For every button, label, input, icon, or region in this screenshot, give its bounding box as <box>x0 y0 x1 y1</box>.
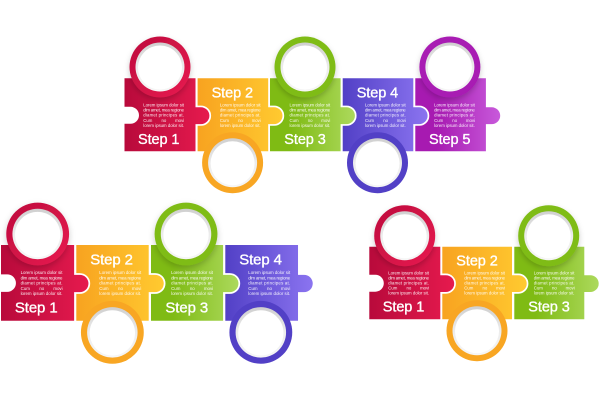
piece: step 1 with notch and tab <box>124 78 209 151</box>
text: step 1 body <box>21 270 63 296</box>
piece: step 3 with tab <box>151 245 238 321</box>
text: step 3 body: dim amet, mea regione <box>171 275 214 280</box>
text: step 4 body: Lorem ipsum dolor sit <box>365 103 406 108</box>
text: step 1 body: movi <box>53 286 63 291</box>
text: step 4 body: dim amet, mea regione <box>365 108 406 113</box>
heading: step 5: Step 5 <box>429 132 470 148</box>
panel: bottom right, step 3 <box>514 205 599 319</box>
panel: bottom left, step 4 <box>225 245 313 364</box>
text: step 4 body: lorem ipsum dolor sit. <box>365 123 406 128</box>
text: step 1 body: lorem ipsum dolor sit. <box>388 291 429 296</box>
text: step 1 body: no <box>39 286 45 291</box>
ring: step 1 <box>374 205 435 266</box>
panel: top row, step 2 <box>198 78 282 193</box>
text: step 2 body: dim amet, mea regione <box>99 275 142 280</box>
text: step 4 body: dim amet, mea regione <box>248 275 291 280</box>
piece: step 5 with tab <box>415 78 500 151</box>
panel: top row, step 5 <box>415 37 500 151</box>
text: step 1 body: Lorem ipsum dolor sit <box>21 270 63 275</box>
text: step 2 body: Cum <box>99 286 109 291</box>
piece: step 3 with tab <box>270 78 355 151</box>
ring: step 4 <box>347 132 408 193</box>
piece: step 2 with tab <box>198 78 282 151</box>
heading: step 4: Step 4 <box>357 85 398 101</box>
text: step 2 body <box>99 270 142 296</box>
text: step 1 body: movi <box>175 118 184 123</box>
piece: step 4 with tab <box>225 245 313 321</box>
text: step 3 body <box>171 270 214 296</box>
text: step 3 body: dim amet, mea regione <box>534 276 575 281</box>
text: step 3 body: Cum <box>171 286 181 291</box>
text: step 4 body: no <box>267 286 272 291</box>
text: step 4 body: diamet principes at. <box>365 113 406 118</box>
text: step 3 body: dim amet, mea regione <box>290 108 331 113</box>
piece: step 1 with notch and tab <box>369 247 454 319</box>
text: step 3 body: movi <box>566 286 575 291</box>
text: step 1 body: Lorem ipsum dolor sit <box>388 271 430 276</box>
piece: step 4 with tab <box>343 78 428 151</box>
text: step 2 body: Lorem ipsum dolor sit <box>220 103 261 108</box>
text: step 5 body: movi <box>466 118 475 123</box>
text: step 3 body <box>534 271 575 296</box>
panel: bottom left, step 2 <box>76 245 164 364</box>
text: step 5 body: lorem ipsum dolor sit. <box>434 123 475 128</box>
text: step 3 body: movi <box>321 118 330 123</box>
panel: top row, step 1 <box>124 37 209 151</box>
text: step 3 body: Lorem ipsum dolor sit <box>534 271 575 276</box>
text: step 2 body: Lorem ipsum dolor sit <box>99 270 142 275</box>
piece: step 3 with tab <box>514 247 599 319</box>
text: step 2 body: diamet principes at. <box>220 113 261 118</box>
text: step 3 body <box>290 102 331 128</box>
heading: step 2: Step 2 <box>212 85 253 101</box>
text: step 2 body: Cum <box>220 118 229 123</box>
text: step 5 body: Lorem ipsum dolor sit <box>434 103 476 108</box>
text: step 5 body: no <box>452 118 458 123</box>
text: step 1 body: Cum <box>21 286 30 291</box>
ring: step 3 <box>274 37 336 98</box>
text: step 3 body: no <box>552 286 557 291</box>
text: step 1 body <box>388 271 430 296</box>
heading: step 3: Step 3 <box>284 132 326 148</box>
text: step 1 body: no <box>406 286 412 291</box>
text: step 3 body: Lorem ipsum dolor sit <box>290 103 331 108</box>
text: step 2 body: dim amet, mea regione <box>464 276 506 281</box>
text: step 3 body: Cum <box>290 118 299 123</box>
text: step 3 body: lorem ipsum dolor sit. <box>534 291 574 296</box>
text: step 4 body: Cum <box>248 286 258 291</box>
text: step 2 body: no <box>482 286 488 291</box>
text: step 4 body: movi <box>397 118 406 123</box>
heading: step 4: Step 4 <box>239 252 282 269</box>
ring: step 4 <box>229 301 292 364</box>
panel: top row, step 4 <box>343 78 428 193</box>
text: step 2 body: dim amet, mea regione <box>220 108 261 113</box>
text: step 3 body: diamet principes at. <box>171 281 213 286</box>
text: step 5 body: Cum <box>434 118 444 123</box>
text: step 2 body: Cum <box>464 286 474 291</box>
text: step 4 body: diamet principes at. <box>248 281 290 286</box>
text: step 3 body: lorem ipsum dolor sit. <box>171 291 213 296</box>
text: step 4 body: Lorem ipsum dolor sit <box>248 270 291 275</box>
ring: step 2 <box>202 132 263 193</box>
text: step 4 body <box>248 270 291 296</box>
text: step 4 body: no <box>383 118 389 123</box>
piece: step 1 with notch and tab <box>1 245 88 321</box>
text: step 2 body: lorem ipsum dolor sit. <box>99 291 141 296</box>
heading: step 1: Step 1 <box>383 300 424 316</box>
piece: step 2 with tab <box>76 245 164 321</box>
ring: step 2 <box>446 300 508 361</box>
text: step 1 body: Cum <box>388 286 398 291</box>
panel: top row, step 3 <box>270 37 355 151</box>
text: step 1 body: lorem ipsum dolor sit. <box>21 291 62 296</box>
text: step 2 body: diamet principes at. <box>464 281 505 286</box>
text: step 2 body: movi <box>252 118 261 123</box>
text: step 1 body: lorem ipsum dolor sit. <box>143 123 184 128</box>
heading: step 3: Step 3 <box>165 300 208 317</box>
panel: bottom right, step 2 <box>442 247 527 361</box>
text: step 1 body: diamet principes at. <box>388 281 429 286</box>
panel: bottom left, step 1 <box>1 203 88 321</box>
panel: bottom left, step 3 <box>151 203 238 321</box>
text: step 4 body: lorem ipsum dolor sit. <box>248 291 290 296</box>
text: step 1 body: no <box>162 118 167 123</box>
text: step 2 body <box>220 102 261 128</box>
text: step 3 body: no <box>308 118 313 123</box>
heading: step 2: Step 2 <box>90 252 133 269</box>
ring: step 1 <box>6 203 69 265</box>
ring: step 1 <box>130 37 190 98</box>
text: step 1 body: Lorem ipsum dolor sit <box>143 103 185 108</box>
text: step 5 body <box>434 102 476 128</box>
text: step 2 body: diamet principes at. <box>99 281 141 286</box>
text: step 2 body: movi <box>132 286 141 291</box>
text: step 4 body <box>365 102 406 128</box>
text: step 1 body: dim amet, mea regione <box>388 276 430 281</box>
ring: step 2 <box>81 301 144 364</box>
text: step 2 body: lorem ipsum dolor sit. <box>220 123 261 128</box>
heading: step 2: Step 2 <box>456 254 498 270</box>
ring: step 3 <box>518 205 579 266</box>
text: step 3 body: lorem ipsum dolor sit. <box>290 123 330 128</box>
ring: step 5 <box>419 37 480 98</box>
text: step 1 body: Cum <box>143 118 153 123</box>
text: step 3 body: movi <box>204 286 213 291</box>
text: step 3 body: diamet principes at. <box>290 113 330 118</box>
text: step 1 body: diamet principes at. <box>143 113 184 118</box>
text: step 1 body: dim amet, mea regione <box>143 108 185 113</box>
text: step 3 body: diamet principes at. <box>534 281 574 286</box>
text: step 5 body: diamet principes at. <box>434 113 475 118</box>
text: step 2 body: Lorem ipsum dolor sit <box>464 271 506 276</box>
text: step 1 body: diamet principes at. <box>21 281 62 286</box>
text: step 3 body: no <box>190 286 195 291</box>
panel: bottom right, step 1 <box>369 205 454 319</box>
text: step 5 body: dim amet, mea regione <box>434 108 475 113</box>
text: step 2 body: no <box>118 286 123 291</box>
text: step 2 body <box>464 271 506 296</box>
text: step 4 body: Cum <box>365 118 374 123</box>
text: step 3 body: Lorem ipsum dolor sit <box>171 270 214 275</box>
text: step 1 body: movi <box>420 286 429 291</box>
text: step 2 body: no <box>238 118 243 123</box>
piece: step 2 with tab <box>442 247 527 319</box>
text: step 3 body: Cum <box>534 286 543 291</box>
text: step 4 body: movi <box>281 286 290 291</box>
text: step 1 body <box>143 102 185 128</box>
text: step 1 body: dim amet, mea regione <box>21 275 63 280</box>
ring: step 3 <box>155 203 217 265</box>
text: step 2 body: movi <box>496 286 505 291</box>
heading: step 3: Step 3 <box>528 300 570 316</box>
heading: step 1: Step 1 <box>15 300 58 317</box>
heading: step 1: Step 1 <box>138 132 180 148</box>
text: step 2 body: lorem ipsum dolor sit. <box>464 291 505 296</box>
